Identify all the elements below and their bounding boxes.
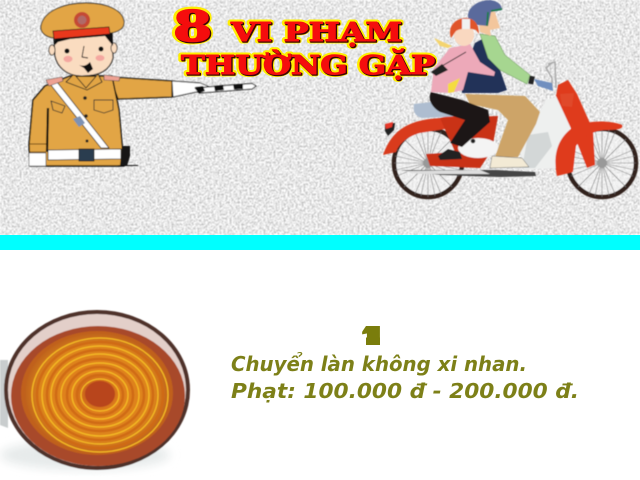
- heading line 1: VI PHẠM: [230, 18, 402, 48]
- rider helmet: [468, 0, 502, 26]
- lamp shadow: [0, 440, 170, 470]
- leg shield: [520, 92, 575, 170]
- rider vest: [461, 35, 507, 93]
- lamp bracket: [0, 360, 8, 428]
- lamp rim: [4, 310, 190, 470]
- glove and baton: [172, 81, 212, 97]
- front fork and fender: [556, 80, 595, 168]
- violation description: [231, 352, 579, 403]
- description line 2: fine: Phạt: 100.000 đ - 200.000 đ.: [231, 379, 579, 403]
- police torso: [29, 76, 124, 166]
- header background: [0, 0, 640, 235]
- pockets and buttons: [51, 100, 113, 113]
- heading line 1: VI PHẠM: [230, 18, 402, 48]
- rear fender: [383, 113, 470, 155]
- heading line 2: THƯỜNG GẶP: [181, 48, 435, 81]
- rider neck and face: [478, 12, 500, 36]
- footboard and exhaust: [400, 170, 536, 177]
- passenger shoe: [438, 149, 462, 160]
- lamp rings: [32, 338, 168, 452]
- violation number: 1: [363, 319, 382, 352]
- number 8: 8: [174, 3, 213, 52]
- heading line 2: THƯỜNG GẶP: [181, 48, 435, 81]
- cap: [41, 3, 124, 38]
- cyan divider band: [0, 235, 640, 250]
- description line 1: Chuyển làn không xi nhan.: [231, 352, 527, 376]
- rider sleeve: [480, 34, 530, 84]
- lamp lens: [21, 331, 173, 455]
- white left cuff: [29, 153, 46, 166]
- left arm line: [47, 108, 48, 152]
- rear wheel: [394, 129, 462, 197]
- mirror and handlebar: [546, 62, 556, 90]
- front wheel: [568, 129, 636, 197]
- passenger jacket: [431, 44, 495, 93]
- lamp shaded grooves: [37, 342, 163, 448]
- photo: turn signal lamp: [0, 310, 190, 470]
- passenger trousers: [430, 92, 490, 147]
- police arm: [110, 77, 172, 99]
- lamp centre: [85, 381, 115, 407]
- illustration: traffic policeman: [29, 3, 256, 166]
- headlight: [560, 93, 574, 107]
- passenger bag strap: [431, 64, 448, 76]
- holster: [120, 146, 130, 166]
- illustration: couple riding a motorbike: [383, 0, 636, 197]
- number 8: 8: [173, 2, 212, 51]
- rider shoe: [490, 156, 529, 168]
- belt: [48, 149, 121, 160]
- title: 8 vi phạm thường gặp: [173, 2, 436, 82]
- white sash: [50, 82, 109, 148]
- heading line 2: THƯỜNG GẶP: [182, 49, 436, 82]
- passenger helmet: [450, 18, 479, 38]
- heading line 1: VI PHẠM: [231, 19, 403, 49]
- frame: [426, 116, 498, 168]
- number 8: 8: [173, 2, 212, 51]
- face: [54, 32, 113, 76]
- seat: [414, 102, 462, 118]
- passenger face: [454, 24, 474, 46]
- collar and shoulder boards: [66, 74, 102, 90]
- white engine: [458, 138, 498, 158]
- rider trousers: [465, 94, 540, 157]
- passenger hair: [434, 38, 452, 48]
